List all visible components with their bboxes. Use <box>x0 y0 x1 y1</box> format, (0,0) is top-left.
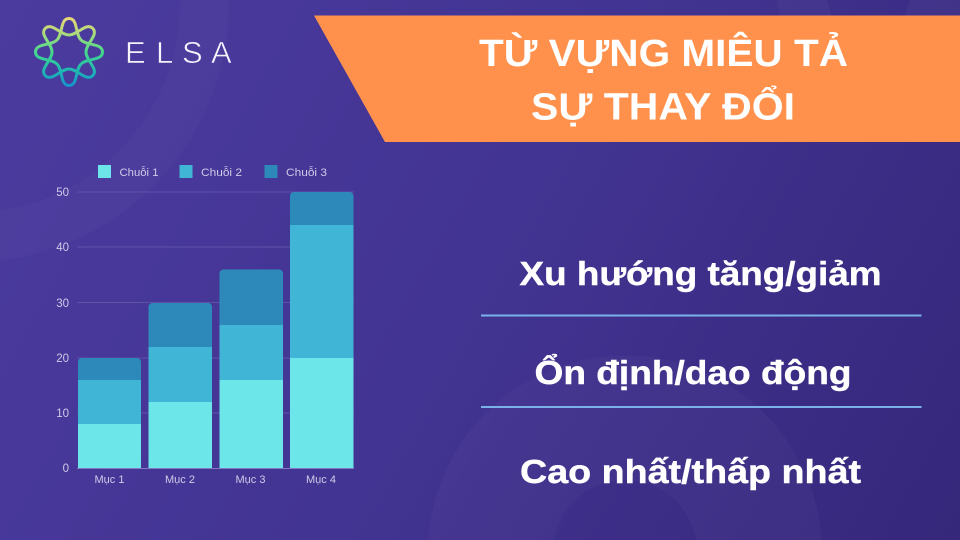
x axis labels: Mục 1 <box>95 474 124 486</box>
logo: ELSA <box>34 17 232 87</box>
legend: Chuỗi 1 <box>120 166 158 179</box>
x axis labels: Mục 4 <box>306 474 336 486</box>
title line 2: SỰ THAY ĐỔI <box>531 84 795 128</box>
y axis labels <box>56 187 69 475</box>
bars: Mục 1 <box>78 358 141 468</box>
item: extremes: Cao nhất/thấp nhất <box>520 453 861 490</box>
vocabulary list <box>481 255 922 490</box>
x axis labels: Mục 3 <box>236 474 265 486</box>
icon: ELSA rosette <box>34 17 104 87</box>
stacked bar chart <box>56 165 354 486</box>
bars: Mục 4 <box>290 192 354 468</box>
y axis labels: 40 <box>56 242 69 254</box>
bars: Mục 3 <box>220 270 283 468</box>
grid lines <box>77 192 354 468</box>
logo wordmark: ELSA <box>125 35 232 70</box>
x axis labels: Mục 2 <box>165 474 195 486</box>
item: stability: Ổn định/dao động <box>534 354 852 391</box>
legend: Chuỗi 3 <box>286 166 327 179</box>
title banner <box>314 16 960 142</box>
title line 1: TỪ VỰNG MIÊU TẢ <box>479 31 848 75</box>
x axis labels <box>95 474 336 486</box>
y axis labels: 20 <box>56 353 69 365</box>
legend <box>98 165 327 179</box>
banner shape <box>314 16 960 142</box>
item: trend: Xu hướng tăng/giảm <box>520 255 882 292</box>
legend: Chuỗi 2 <box>201 166 242 179</box>
y axis labels: 10 <box>56 408 69 420</box>
y axis labels: 30 <box>56 298 69 310</box>
y axis labels: 50 <box>56 187 69 199</box>
y axis labels: 0 <box>63 463 69 475</box>
bars: Mục 2 <box>148 303 212 468</box>
